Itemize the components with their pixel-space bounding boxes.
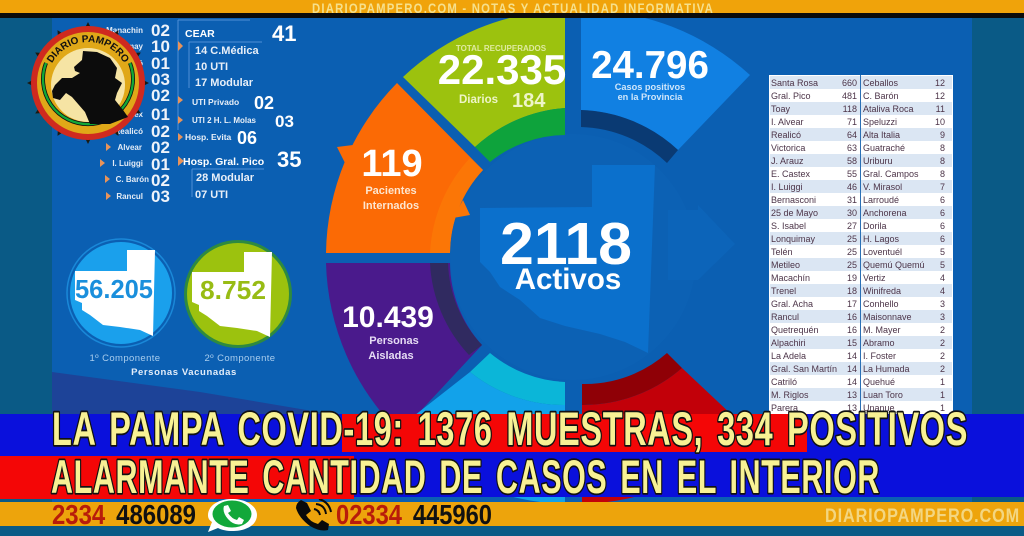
text: recovered: Diarios	[459, 94, 498, 106]
list: hospital beds: CEAR	[185, 28, 215, 40]
landline phone number: 02334 445960	[336, 499, 492, 530]
logo title: DIARIO PAMPERO	[46, 35, 128, 63]
segment: cyan lower	[396, 353, 565, 504]
table: cases by locality: Gral. Pico	[771, 91, 811, 101]
table: cases by locality: Telén	[771, 247, 793, 257]
table: cases by locality: 14	[847, 377, 857, 387]
list: hospital beds: 02	[254, 93, 274, 113]
list: left locality counts: 01	[151, 155, 170, 174]
vaccine circle: second dose	[184, 240, 292, 348]
table: cases by locality: 15	[847, 338, 857, 348]
list: left locality counts: Toay	[125, 75, 144, 84]
table: cases by locality: 16	[847, 312, 857, 322]
text: hospitalised	[361, 143, 423, 212]
list: left locality counts: 01	[151, 54, 170, 73]
table: cases by locality: C. Barón	[863, 91, 899, 101]
segment: recovered	[403, 10, 565, 162]
list: left locality counts: 02	[151, 122, 170, 141]
list: left locality counts: Alvear	[118, 143, 142, 152]
table: cases by locality: M. Riglos	[771, 390, 809, 400]
table: cases by locality: Vertiz	[863, 273, 886, 283]
list: hospital beds: UTI 2 H. L. Molas	[192, 116, 257, 125]
table: cases by locality: I. Foster	[863, 351, 896, 361]
table: cases by locality: 19	[847, 273, 857, 283]
table: cases by locality: 9	[940, 130, 945, 140]
icon: telephone	[296, 499, 331, 530]
list: hospital beds: Hosp. Gral. Pico	[183, 156, 264, 168]
table: cases by locality: 11	[936, 104, 945, 114]
list: left locality counts: C. Barón	[116, 175, 149, 184]
text: positive cases: 24.796	[591, 44, 709, 87]
vaccine circle: first dose	[67, 239, 175, 347]
list: hospital beds	[178, 20, 301, 201]
list: hospital beds: 03	[275, 112, 294, 131]
list: left locality counts: Realicó	[115, 127, 143, 136]
list: hospital beds: Hosp. Evita	[185, 132, 232, 142]
vaccine labels	[90, 353, 276, 378]
table: cases by locality: 25	[847, 247, 857, 257]
list: left locality counts: 01	[151, 105, 170, 124]
table: cases by locality: Larroudé	[863, 195, 899, 205]
table: cases by locality: Gral. San Martín	[771, 364, 837, 374]
segment: hospitalised patients	[326, 83, 483, 253]
table: cases by locality: 13	[847, 390, 857, 400]
table: cases by locality: 2	[940, 325, 945, 335]
table: cases by locality: 6	[940, 221, 945, 231]
segment: positive cases	[581, 10, 750, 163]
table: cases by locality: Trenel	[771, 286, 796, 296]
list: left locality counts: E. Castex	[107, 110, 144, 119]
table: cases by locality: Victorica	[771, 143, 805, 153]
whatsapp phone number: 2334 486089	[52, 499, 196, 530]
text: recovered: 22.335	[438, 46, 566, 93]
table: cases by locality: H. Lagos	[863, 234, 900, 244]
list: left locality counts	[100, 21, 170, 206]
table: cases by locality: 2	[940, 364, 945, 374]
logo horse	[52, 51, 128, 124]
list: hospital beds: 28 Modular	[196, 172, 255, 184]
table: cases by locality: M. Mayer	[863, 325, 901, 335]
table: cases by locality: 1	[940, 403, 945, 413]
table: cases by locality: Lonquimay	[771, 234, 816, 244]
table: cases by locality: 2	[940, 338, 945, 348]
table: cases by locality: 2	[940, 351, 945, 361]
table: cases by locality: J. Arauz	[771, 156, 804, 166]
vaccine labels: Personas Vacunadas	[131, 367, 237, 378]
text: isolated: 10.439	[342, 301, 434, 334]
headline banner	[0, 402, 1024, 503]
table: cases by locality: Toay	[771, 104, 791, 114]
table: cases by locality: E. Castex	[771, 169, 811, 179]
list: hospital beds: 06	[237, 128, 257, 148]
table: cases by locality: Realicó	[771, 130, 801, 140]
donut chart with six segments	[326, 10, 750, 504]
icon: whatsapp	[208, 499, 257, 532]
table: cases by locality: Abramo	[863, 338, 895, 348]
table: cases by locality: 16	[847, 325, 857, 335]
list: hospital beds: 17 Modular	[195, 77, 254, 89]
table: cases by locality: Quemú Quemú	[863, 260, 925, 270]
vaccine circle: second dose: 8.752	[200, 275, 266, 305]
faint arrow	[668, 205, 735, 280]
list: left locality counts: Lonquimay	[100, 42, 144, 51]
table: cases by locality: V. Mirasol	[863, 182, 902, 192]
map of La Pampa in the centre	[480, 165, 655, 353]
text: recovered: 184	[512, 90, 546, 112]
text: isolated	[342, 301, 434, 362]
segment: red lower	[582, 353, 750, 504]
text: recovered	[438, 44, 566, 112]
table: cases by locality: I. Luiggi	[771, 182, 803, 192]
table: cases by locality: 10	[935, 117, 945, 127]
table: cases by locality: Catriló	[771, 377, 797, 387]
list: left locality counts: Manachin	[106, 26, 143, 35]
lower left dark corner	[52, 372, 330, 414]
list: left locality counts: 03	[151, 70, 170, 89]
list: left locality counts: 10	[151, 37, 170, 56]
text: active cases: Activos	[515, 263, 621, 296]
table: cases by locality: 3	[940, 299, 945, 309]
text: isolated: Aisladas	[368, 350, 414, 362]
logo: Diario Pampero	[27, 22, 149, 144]
table: cases by locality: Loventuél	[863, 247, 902, 257]
table: cases by locality: 14	[847, 351, 857, 361]
table: cases by locality: 13	[847, 403, 857, 413]
list: left locality counts: Victorica	[109, 91, 144, 100]
table: cases by locality: Bernasconi	[771, 195, 816, 205]
table: cases by locality: 3	[940, 312, 945, 322]
table: cases by locality: La Adela	[771, 351, 806, 361]
table: cases by locality: Speluzzi	[863, 117, 897, 127]
table: cases by locality: 71	[847, 117, 857, 127]
table: cases by locality: 8	[940, 169, 945, 179]
table: cases by locality: 4	[940, 273, 945, 283]
table: cases by locality: Quetrequén	[771, 325, 819, 335]
table: cases by locality: Luan Toro	[863, 390, 903, 400]
table: cases by locality: Parera	[771, 403, 798, 413]
table: cases by locality: Gral. Campos	[863, 169, 919, 179]
text: positive cases: Casos positivos	[615, 82, 685, 92]
list: left locality counts: 02	[151, 86, 170, 105]
table: cases by locality: Alta Italia	[863, 130, 900, 140]
table: cases by locality: 1	[940, 377, 945, 387]
table: cases by locality: 14	[847, 364, 857, 374]
list: left locality counts: 02	[151, 21, 170, 40]
table: cases by locality: 8	[940, 143, 945, 153]
vaccine labels: 1º Componente	[90, 353, 160, 364]
list: left locality counts: Catriló	[118, 59, 143, 68]
table: cases by locality: 12	[935, 78, 945, 88]
table: cases by locality: Ataliva Roca	[863, 104, 914, 114]
table: cases by locality: Metileo	[771, 260, 800, 270]
top header bar	[0, 0, 1024, 18]
table: cases by locality: 8	[940, 156, 945, 166]
table: cases by locality: S. Isabel	[771, 221, 806, 231]
list: left locality counts: I. Luiggi	[112, 159, 143, 168]
bottom contact bar	[0, 499, 1024, 536]
table: cases by locality: 18	[847, 286, 857, 296]
table: cases by locality: 12	[935, 91, 945, 101]
table: cases by locality: Alpachiri	[771, 338, 806, 348]
table: cases by locality: 660	[842, 78, 857, 88]
table: cases by locality: 64	[847, 130, 857, 140]
table: cases by locality: 25	[847, 260, 857, 270]
table: cases by locality: La Humada	[863, 364, 910, 374]
table: cases by locality: 63	[847, 143, 857, 153]
table: cases by locality: 55	[847, 169, 857, 179]
text: positive cases: en la Provincia	[618, 92, 683, 102]
list: hospital beds: 10 UTI	[195, 61, 228, 73]
text: active cases: 2118	[500, 211, 632, 277]
table: cases by locality: Anchorena	[863, 208, 907, 218]
table: cases by locality: 6	[940, 195, 945, 205]
table: cases by locality: Quehué	[863, 377, 895, 387]
table: cases by locality: 118	[843, 104, 857, 114]
text: recovered: TOTAL RECUPERADOS	[456, 44, 547, 53]
table: cases by locality: 58	[847, 156, 857, 166]
vaccine labels: 2º Componente	[204, 353, 276, 364]
table: cases by locality: I. Alvear	[771, 117, 804, 127]
table: cases by locality: 30	[847, 208, 857, 218]
segment: isolated people	[326, 263, 482, 433]
table: cases by locality: Rancul	[771, 312, 799, 322]
table: cases by locality: Dorila	[863, 221, 887, 231]
table: cases by locality: Gral. Acha	[771, 299, 813, 309]
table: cases by locality: 25	[847, 234, 857, 244]
text: isolated: Personas	[369, 335, 419, 347]
table: cases by locality: Guatraché	[863, 143, 905, 153]
table: cases by locality: 481	[842, 91, 857, 101]
list: left locality counts: 02	[151, 138, 170, 157]
table: cases by locality: 46	[847, 182, 857, 192]
vaccine circle: first dose: 56.205	[75, 274, 153, 304]
table: cases by locality: 7	[940, 182, 945, 192]
table: cases by locality: Conhello	[863, 299, 899, 309]
table: cases by locality: 5	[940, 260, 945, 270]
list: left locality counts: 02	[151, 171, 170, 190]
list: left locality counts: 03	[151, 187, 170, 206]
text: hospitalised: Internados	[363, 200, 419, 212]
table: cases by locality: 4	[940, 286, 945, 296]
table: cases by locality: 6	[940, 234, 945, 244]
text: hospitalised: Pacientes	[365, 185, 417, 197]
table: cases by locality: Maisonnave	[863, 312, 912, 322]
list: left locality counts: Rancul	[116, 192, 143, 201]
top header bar: DIARIOPAMPERO.COM - NOTAS Y ACTUALIDAD INFORMATIVA	[312, 0, 714, 16]
list: hospital beds: 14 C.Médica	[195, 45, 259, 57]
table: cases by locality: 6	[940, 208, 945, 218]
table: cases by locality: 5	[940, 247, 945, 257]
table: cases by locality: 25 de Mayo	[771, 208, 818, 218]
table: cases by locality: 1	[940, 390, 945, 400]
list: hospital beds: 41	[272, 21, 296, 46]
table: cases by locality: Uriburu	[863, 156, 893, 166]
list: hospital beds: 07 UTI	[195, 189, 228, 201]
table: cases by locality: 27	[847, 221, 857, 231]
table: cases by locality	[769, 75, 953, 420]
table: cases by locality: Santa Rosa	[771, 78, 818, 88]
table: cases by locality: 17	[847, 299, 857, 309]
list: hospital beds: 35	[277, 147, 301, 172]
list: hospital beds: UTI Privado	[192, 97, 239, 107]
table: cases by locality: Unanue	[863, 403, 895, 413]
table: cases by locality: Winifreda	[863, 286, 901, 296]
table: cases by locality: Macachín	[771, 273, 810, 283]
text: hospitalised: 119	[361, 143, 423, 185]
table: cases by locality: Ceballos	[863, 78, 899, 88]
table: cases by locality: 31	[847, 195, 857, 205]
